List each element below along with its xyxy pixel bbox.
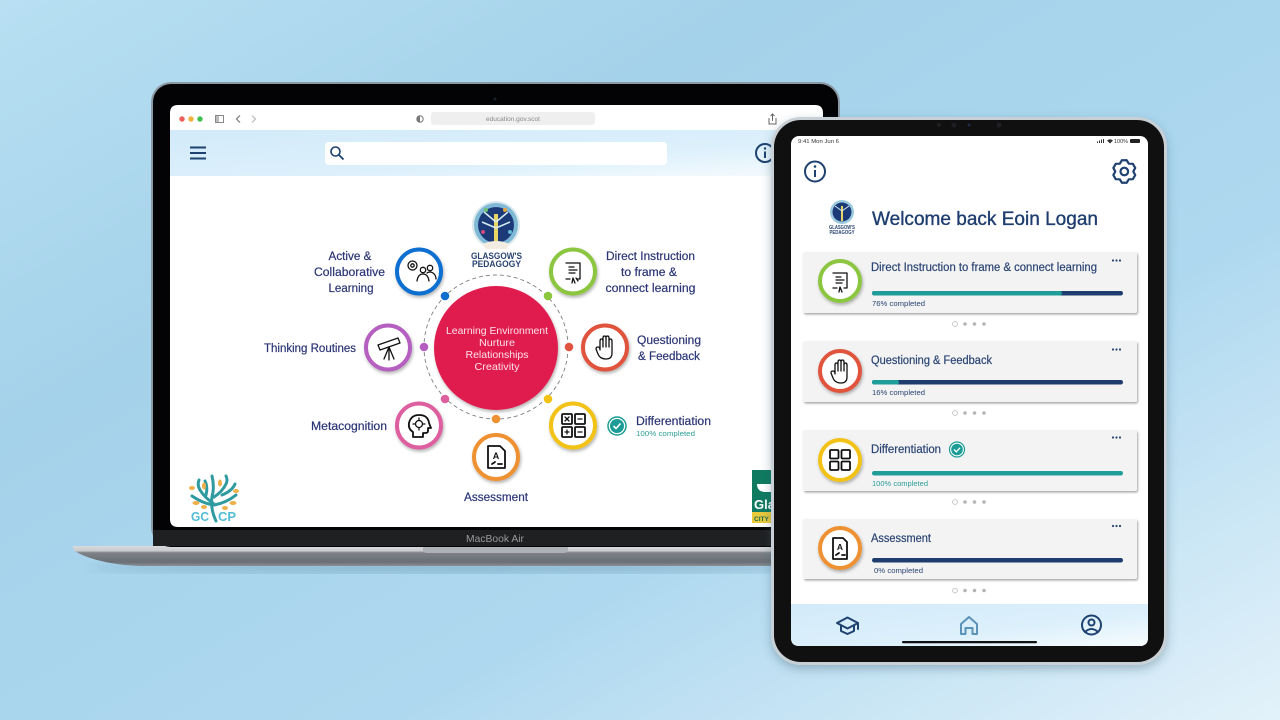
centre circle [434,286,558,410]
card: Assessment [803,519,1137,579]
app header bar [170,130,823,176]
icon: home [961,617,977,634]
status bar: 100% [1114,139,1128,145]
icon: info [805,162,825,182]
card: Assessment: 0% completed [874,566,923,575]
node: Active & Collaborative Learning [314,250,441,295]
Glasgow City Council logo: Gla [754,497,776,512]
node: Differentiation [551,404,711,448]
card: Direct Instruction [803,252,1137,313]
icon: hamburger menu [190,148,206,158]
home indicator [902,641,1037,643]
node: Questioning & Feedback [583,326,701,370]
icon: profile [1082,616,1101,634]
pager dots [953,588,986,593]
completed check badge [608,417,626,435]
laptop base [73,546,860,573]
Glasgow's Pedagogy logo [471,201,522,269]
dashed ring [424,275,568,419]
label: MacBook Air: MacBook Air [466,533,524,545]
centre circle: Nurture [479,337,515,349]
node: Differentiation: Differentiation [636,416,711,428]
card: Questioning & Feedback [803,341,1137,402]
node: Assessment: A [493,451,500,461]
centre circle: Creativity [474,361,520,373]
centre circle: Learning Environment [446,325,548,337]
card: Questioning & Feedback: Questioning & Feedback [871,355,992,367]
node: Active & Collaborative Learning: Collaborative [314,267,385,279]
node: Direct Instruction: Direct Instruction [606,251,695,263]
icon: info [756,144,774,162]
browser toolbar: education.gov.scot [486,116,540,123]
node: Questioning & Feedback: Questioning [637,335,701,347]
laptop screen [170,105,823,527]
icon: settings gear [1113,160,1135,183]
node: Direct Instruction: to frame & [621,267,677,279]
small pedagogy logo [829,200,856,236]
Glasgow's Pedagogy logo: GLASGOW'S [471,251,522,261]
small pedagogy logo: PEDAGOGY [830,230,855,236]
card: Assessment: A [837,542,843,552]
laptop lid and bezel [151,82,840,547]
status bar: 9:41 Mon Jun 6 [798,139,839,145]
card: Differentiation: Differentiation [871,444,941,456]
pager dots [953,322,986,326]
small pedagogy logo: GLASGOW'S [829,225,856,231]
card: Differentiation [803,430,1137,491]
Glasgow City Council logo [752,470,776,523]
status bar [798,139,1140,145]
card: Assessment: Assessment [871,533,932,545]
pager dots [953,500,986,504]
Glasgow City Council logo: CITY [754,516,769,523]
node: Assessment [464,435,529,504]
search box [325,142,667,165]
card: Direct Instruction: 76% completed [872,299,925,308]
icon: graduation cap [837,618,858,634]
GCCP tree logo: CP [218,509,236,524]
centre circle: Relationships [466,349,528,361]
laptop [73,82,860,573]
node: Differentiation: 100% completed [636,429,695,438]
node: Metacognition [311,404,441,448]
node: Thinking Routines: Thinking Routines [264,343,356,355]
card: Differentiation: 100% completed [872,479,928,488]
browser toolbar [179,112,776,125]
card: Questioning & Feedback: 16% completed [872,388,925,397]
tablet screen [791,136,1148,646]
card: Direct Instruction: Direct Instruction to frame & connect learning [871,262,1097,274]
ring dots [420,292,573,423]
welcome heading: Welcome back Eoin Logan [872,209,1098,230]
node: Direct Instruction: connect learning [606,283,696,295]
bottom navigation bar [791,604,1148,646]
node: Direct Instruction [551,250,696,295]
tablet [771,117,1167,665]
node: Active & Collaborative Learning: Learning [328,283,374,295]
GCCP tree logo [189,476,239,524]
node: Metacognition: Metacognition [311,421,387,433]
GCCP tree logo: GC [191,509,210,524]
tablet body [771,117,1167,665]
Glasgow's Pedagogy logo: PEDAGOGY [472,259,521,269]
node: Questioning & Feedback: & Feedback [638,351,700,363]
node: Active & Collaborative Learning: Active & [328,251,372,263]
node: Assessment: Assessment [464,492,529,504]
pager dots [953,411,986,415]
node: Thinking Routines [264,326,410,370]
